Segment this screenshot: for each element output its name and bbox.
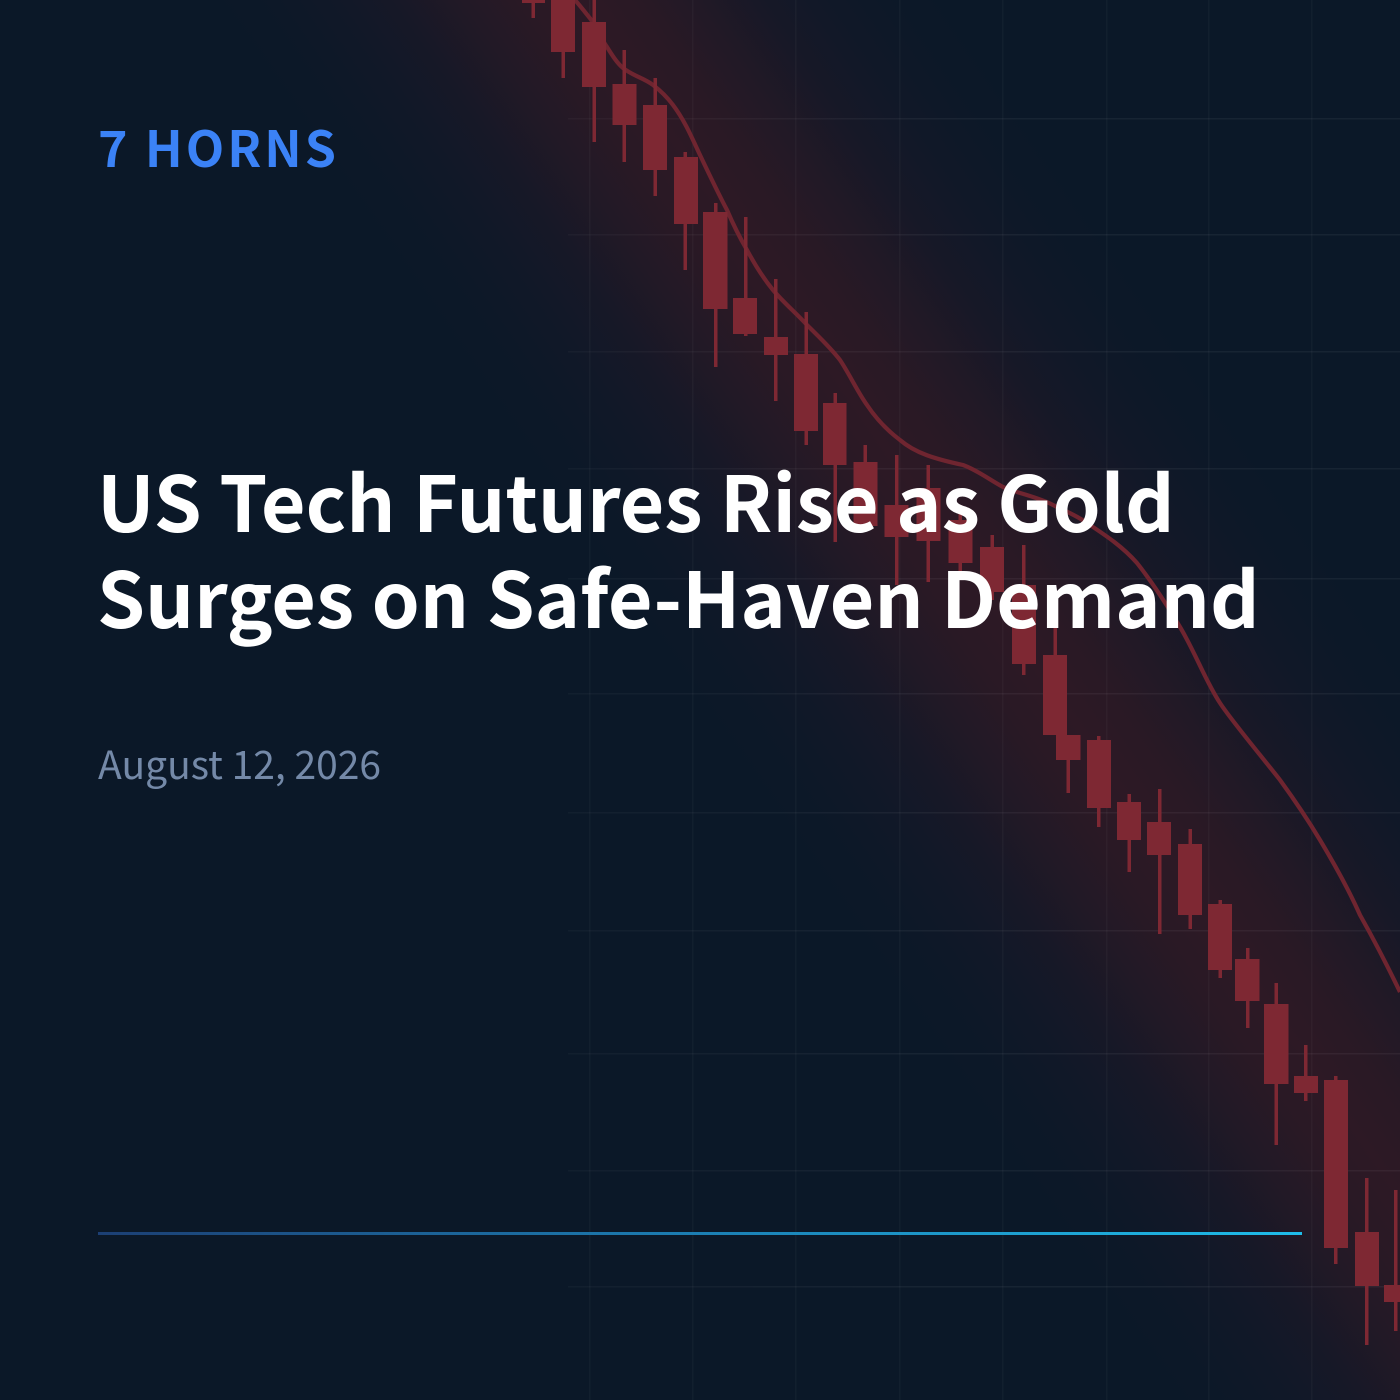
gradient divider rule	[98, 1232, 1302, 1235]
title: US Tech Futures Rise as Gold	[97, 444, 1175, 555]
moving average line	[575, 0, 1400, 992]
title	[97, 444, 1260, 651]
date: August 12, 2026	[98, 735, 381, 791]
candlesticks	[522, 0, 1400, 1345]
title: Surges on Safe-Haven Demand	[97, 540, 1260, 651]
brand logo: 7 HORNS: 7 HORNS	[98, 110, 339, 182]
